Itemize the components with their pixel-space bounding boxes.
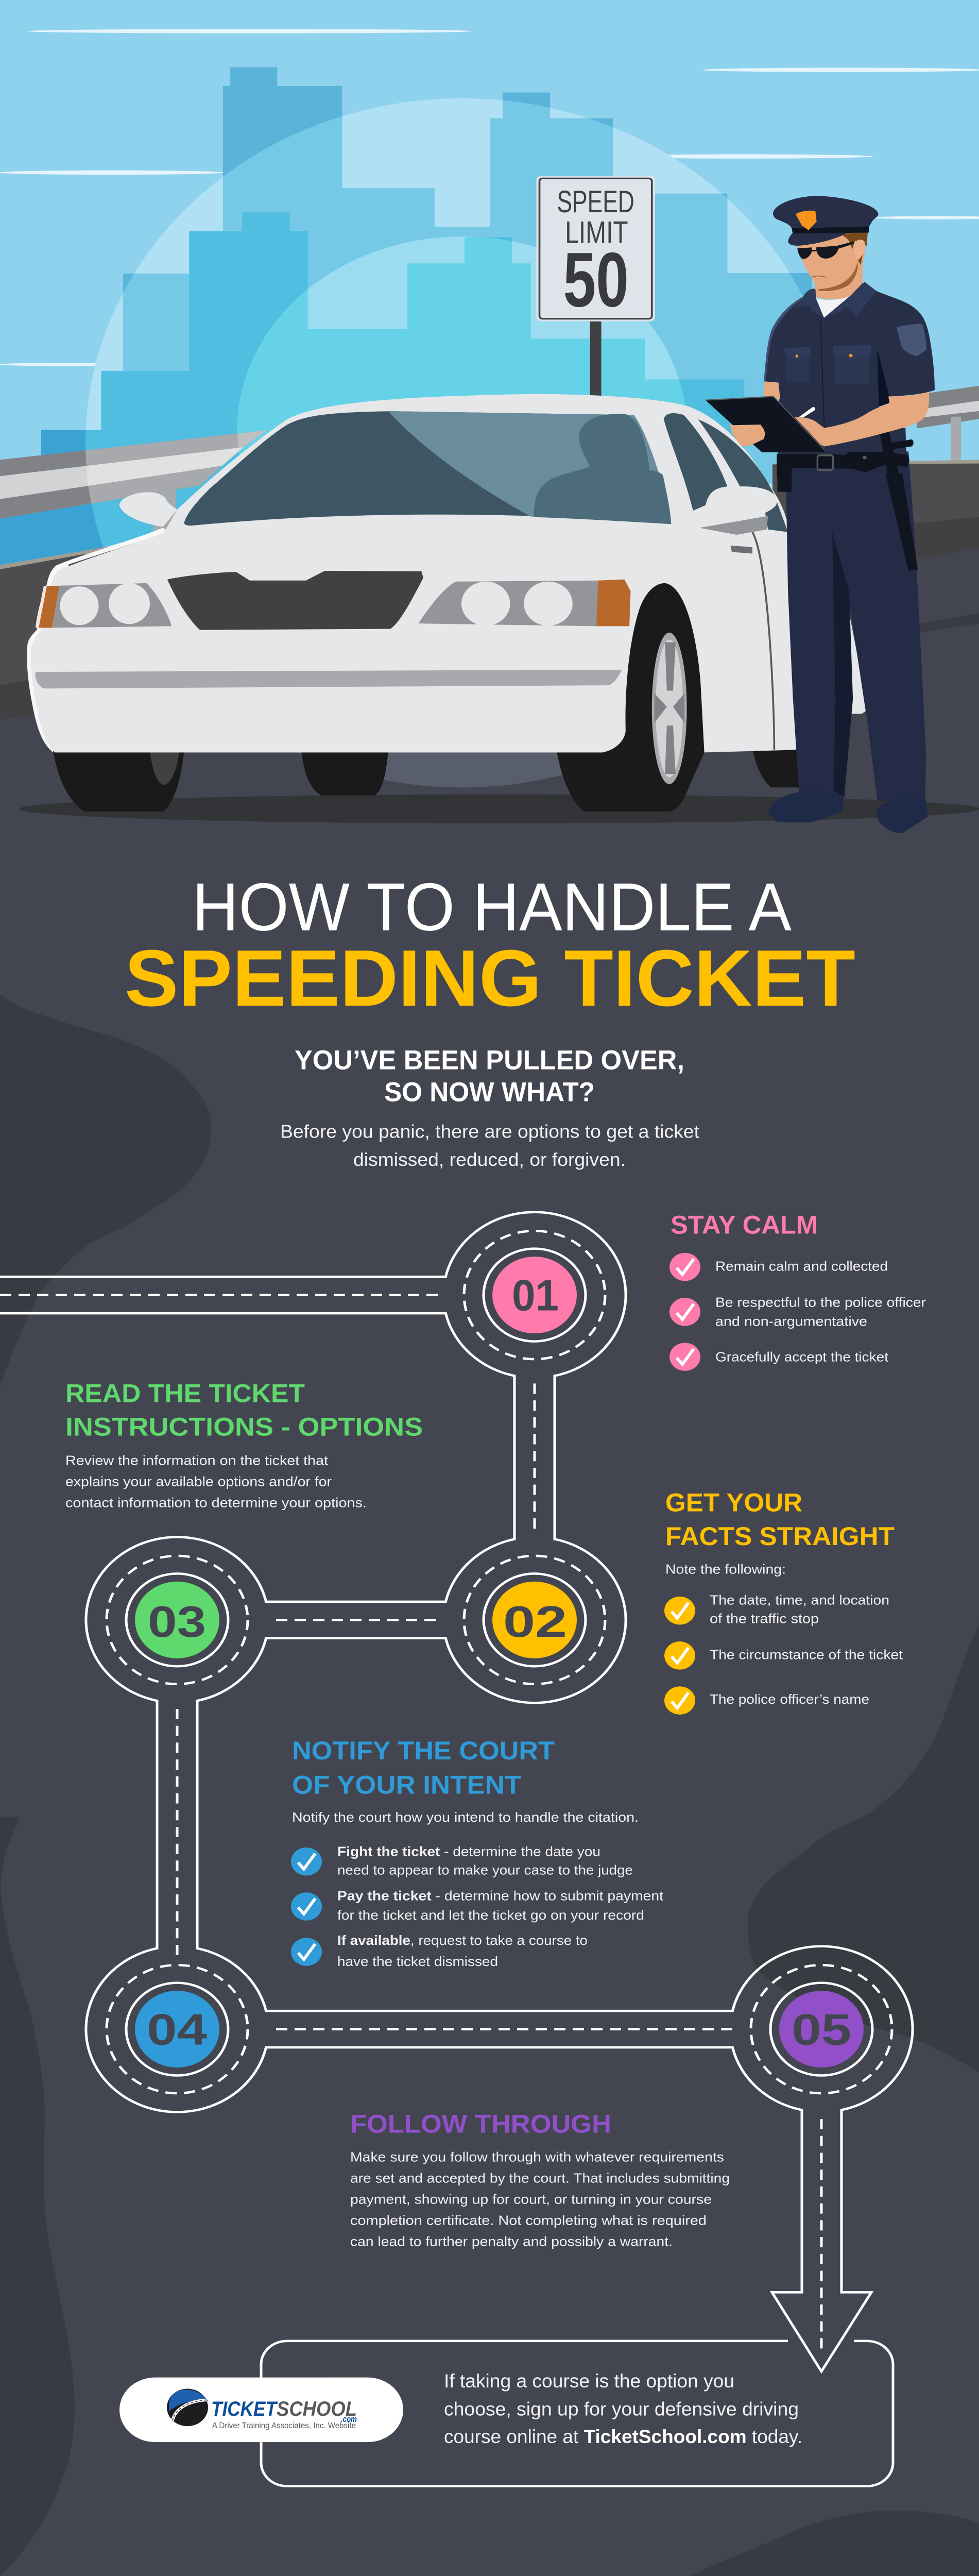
logo wordmark: .com <box>341 2414 357 2424</box>
left upper arm <box>764 382 780 399</box>
sky <box>0 0 979 645</box>
shoes <box>768 791 843 822</box>
heading: FACTS STRAIGHT <box>665 1522 895 1551</box>
check item 1 <box>669 1253 888 1281</box>
trousers <box>785 451 926 801</box>
title <box>125 870 855 1023</box>
jaw shadow <box>818 262 858 291</box>
step 01 marker <box>464 1231 605 1359</box>
step 05 marker <box>751 1965 892 2093</box>
icon: ticket school globe <box>167 2388 208 2426</box>
ear <box>854 240 865 260</box>
heading: INSTRUCTIONS - OPTIONS <box>65 1413 423 1442</box>
body text: explains your available options and/or for <box>65 1475 332 1489</box>
heading: STAY CALM <box>671 1211 818 1240</box>
check item 2: and non-argumentative <box>715 1314 867 1329</box>
speed limit sign: SPEED <box>557 184 634 219</box>
check item 3 <box>669 1343 889 1371</box>
officer legs <box>768 451 928 833</box>
panel: stay calm <box>669 1211 926 1371</box>
mirrors <box>119 492 177 527</box>
heading <box>65 1379 423 1442</box>
body text: can lead to further penalty and possibly a warrant. <box>350 2234 673 2249</box>
hero foreground <box>19 176 979 833</box>
undershirt <box>816 296 851 319</box>
speed limit sign: 50 <box>563 236 629 323</box>
road ground <box>0 460 979 843</box>
intro text: Before you panic, there are options to get a ticket <box>280 1121 699 1142</box>
right arm <box>795 392 929 447</box>
subheading: SO NOW WHAT? <box>384 1077 595 1107</box>
step 04 marker: 04 <box>147 2005 207 2055</box>
speed limit sign: LIMIT <box>565 215 628 249</box>
body text <box>350 2150 730 2249</box>
ground shadow <box>19 794 979 823</box>
intro text <box>280 1121 699 1170</box>
box outline <box>261 2341 893 2486</box>
shirt pockets <box>784 345 871 384</box>
front wheel <box>557 583 705 811</box>
panel: read the ticket <box>65 1379 423 1510</box>
body text <box>65 1453 367 1510</box>
check item 3: Gracefully accept the ticket <box>715 1350 889 1364</box>
collar <box>794 282 877 318</box>
step 05 marker: 05 <box>792 2005 851 2055</box>
panel: notify the court <box>291 1736 664 1969</box>
body text: are set and accepted by the court. That includes submitting <box>350 2171 730 2185</box>
police car <box>27 394 868 811</box>
belt <box>777 452 909 478</box>
check item 1: of the traffic stop <box>710 1612 819 1626</box>
highway barrier <box>0 386 979 532</box>
heading: FOLLOW THROUGH <box>350 2110 611 2139</box>
lead text: Note the following: <box>665 1562 786 1577</box>
check item 1: Fight the ticket - determine the date you <box>337 1844 600 1859</box>
check item 3 <box>664 1686 869 1715</box>
call to action text: choose, sign up for your defensive driving <box>444 2399 799 2420</box>
windshield reflection <box>388 411 671 524</box>
body text: Make sure you follow through with whatever requirements <box>350 2150 724 2164</box>
heading <box>665 1488 895 1551</box>
call to action text <box>444 2370 802 2447</box>
check item 2 <box>664 1641 903 1670</box>
check item 1: The date, time, and location <box>710 1592 889 1607</box>
mouth <box>812 276 826 277</box>
check item 2 <box>291 1889 664 1923</box>
heading: GET YOUR <box>665 1488 802 1517</box>
right headlight <box>418 580 631 626</box>
heading: NOTIFY THE COURT <box>292 1736 555 1766</box>
title: SPEEDING TICKET <box>125 933 855 1023</box>
check item 1 <box>291 1844 633 1877</box>
officer upper body <box>706 196 935 478</box>
check item 3: have the ticket dismissed <box>337 1954 498 1969</box>
intro text: dismissed, reduced, or forgiven. <box>353 1149 626 1170</box>
hand <box>730 423 765 447</box>
bumper strip <box>36 670 622 688</box>
step 01 marker: 01 <box>512 1272 559 1320</box>
speed limit sign <box>536 176 655 398</box>
check item 1: Remain calm and collected <box>715 1259 888 1274</box>
baton <box>880 432 914 478</box>
step 04 marker <box>107 1965 248 2093</box>
tires <box>53 750 184 811</box>
city skyline <box>41 67 812 547</box>
body text: contact information to determine your options. <box>65 1495 367 1510</box>
door seam <box>752 532 774 750</box>
call to action text: If taking a course is the option you <box>444 2370 734 2392</box>
check item 2 <box>669 1295 926 1329</box>
logo wordmark: TICKET <box>211 2397 278 2420</box>
panel: get your facts straight <box>664 1488 903 1715</box>
left headlight <box>36 583 171 628</box>
check item 2: Be respectful to the police officer <box>715 1295 926 1310</box>
check item 3 <box>291 1933 588 1969</box>
step 02 marker: 02 <box>503 1598 567 1647</box>
windshield <box>184 411 671 526</box>
sleeve patch <box>897 324 926 357</box>
lead text: Notify the court how you intend to handle the citation. <box>292 1810 639 1825</box>
heading: READ THE TICKET <box>65 1379 305 1408</box>
logo wordmark: A Driver Training Associates, Inc. Website <box>212 2421 356 2430</box>
panel: call to action box <box>261 2341 893 2486</box>
body text: payment, showing up for court, or turning in your course <box>350 2192 712 2207</box>
check item 2: The circumstance of the ticket <box>710 1648 903 1662</box>
step 03 marker: 03 <box>148 1598 206 1647</box>
side windows <box>664 413 727 511</box>
logo wordmark <box>211 2397 357 2430</box>
grille <box>167 571 423 630</box>
sunglasses <box>797 241 854 259</box>
check item 1 <box>664 1592 889 1626</box>
body text: completion certificate. Not completing what is required <box>350 2213 707 2228</box>
check item 3: The police officer’s name <box>710 1692 869 1707</box>
car body outline <box>27 528 168 753</box>
light circle on road <box>297 752 562 787</box>
face <box>797 233 867 299</box>
subheading: YOU’VE BEEN PULLED OVER, <box>295 1045 684 1075</box>
body text: Review the information on the ticket that <box>65 1453 329 1468</box>
subheading <box>295 1045 684 1107</box>
clouds <box>0 29 979 366</box>
title: HOW TO HANDLE A <box>192 870 792 945</box>
check item 2: Pay the ticket - determine how to submit payment <box>337 1889 664 1903</box>
clipboard <box>706 397 825 452</box>
step 03 marker <box>107 1556 248 1684</box>
police cap <box>773 196 879 246</box>
driver silhouette <box>534 414 671 524</box>
door handle <box>731 546 752 554</box>
logo pill <box>119 2378 403 2442</box>
water <box>0 482 206 565</box>
step 02 marker <box>464 1556 605 1684</box>
logo wordmark: SCHOOL <box>277 2397 357 2420</box>
panel: follow through <box>350 2110 730 2249</box>
check item 3: If available, request to take a course to <box>337 1933 588 1948</box>
pen <box>799 407 815 417</box>
hero backdrop <box>0 0 979 565</box>
car body <box>31 394 796 753</box>
shirt <box>764 282 935 456</box>
hair <box>842 233 868 265</box>
call to action text: course online at TicketSchool.com today. <box>444 2427 802 2447</box>
road path <box>0 1212 913 2371</box>
background blobs <box>0 994 979 2576</box>
heading <box>292 1736 555 1800</box>
check item 2: for the ticket and let the ticket go on your record <box>337 1908 644 1923</box>
holster and baton <box>777 454 918 571</box>
check item 1: need to appear to make your case to the judge <box>337 1863 633 1877</box>
heading: OF YOUR INTENT <box>292 1771 521 1800</box>
